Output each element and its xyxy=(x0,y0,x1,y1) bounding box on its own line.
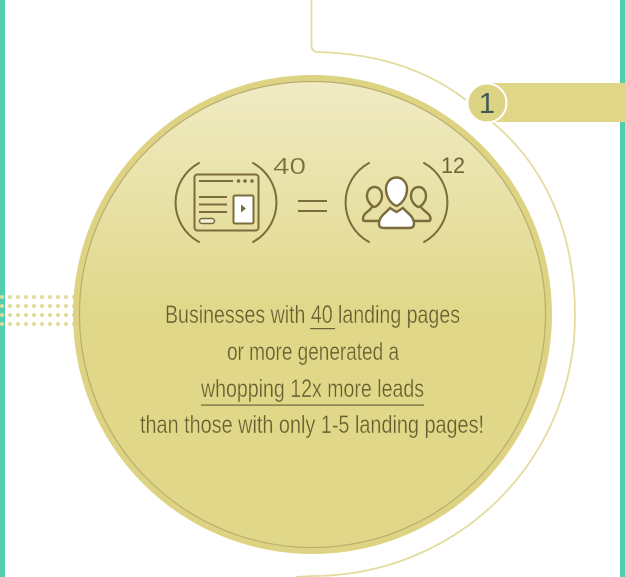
statement text xyxy=(140,301,484,439)
statement text: Businesses with 40 landing pages xyxy=(165,301,460,329)
icon: people group xyxy=(363,178,430,228)
number badge: 1 xyxy=(479,88,495,120)
connector line xyxy=(296,0,575,577)
statement text: than those with only 1-5 landing pages! xyxy=(140,411,484,439)
right teal border xyxy=(620,0,625,577)
icon: right parentheses xyxy=(346,163,447,242)
number badge xyxy=(468,84,506,122)
underline: 12x more leads xyxy=(201,404,424,406)
main circle xyxy=(73,75,552,554)
statement text: or more generated a xyxy=(227,338,399,366)
dot pattern xyxy=(0,295,76,326)
left teal border xyxy=(0,0,5,577)
exponent 12: 12 xyxy=(441,153,465,178)
icon: left parentheses xyxy=(176,163,276,242)
exponent 40: 40 xyxy=(273,153,306,179)
equation icons xyxy=(176,153,465,242)
underline: 40 xyxy=(310,328,335,329)
statement text: whopping 12x more leads xyxy=(200,375,424,403)
equals sign xyxy=(298,201,327,211)
number band xyxy=(490,83,625,122)
icon: landing page window xyxy=(194,174,258,230)
